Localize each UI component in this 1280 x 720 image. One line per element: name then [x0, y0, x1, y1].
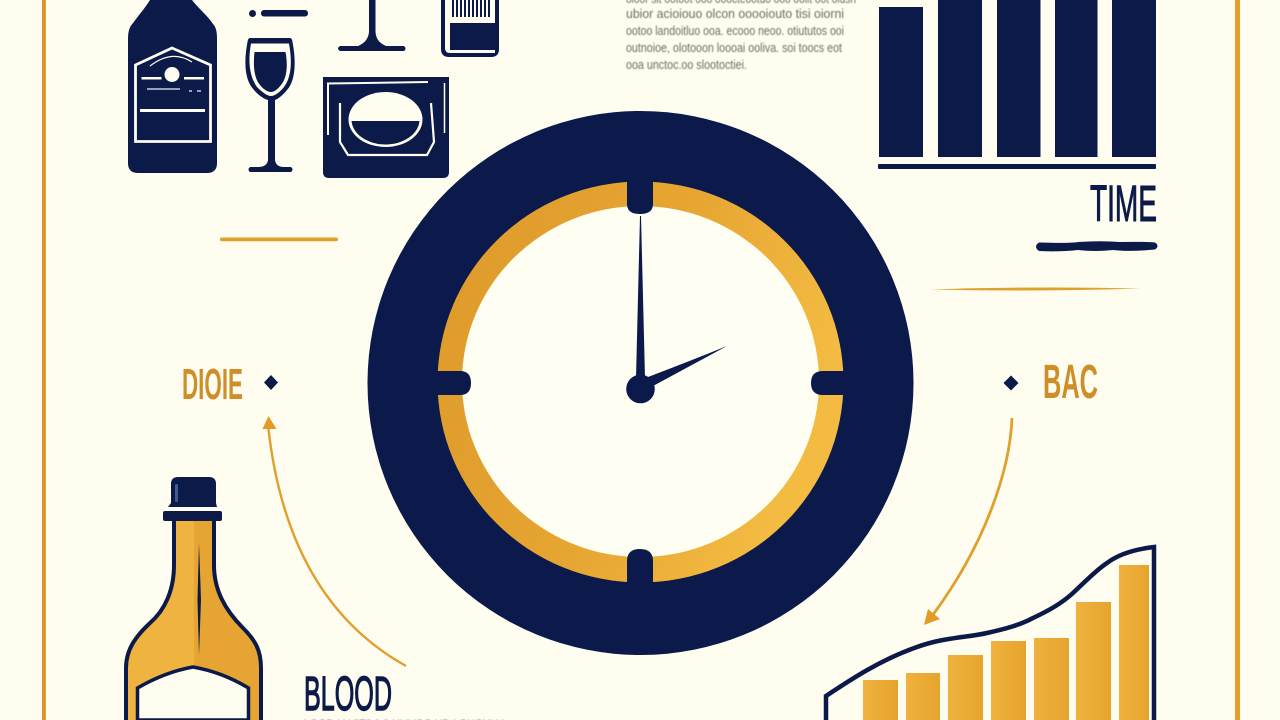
paragraph text: ootoo landoitluo ooa. ecooo neoo. otiututos ooi	[626, 24, 844, 38]
label: BAC: BAC	[1043, 356, 1098, 409]
icon: label box top right of glass	[441, 0, 499, 57]
icon: amber bottle	[126, 477, 261, 720]
small dash above wine glass	[249, 10, 308, 17]
icon: glass stem at top	[338, 0, 406, 51]
paragraph text: ubior acioiouo olcon ooooiouto tisi oiorni	[626, 7, 844, 21]
paragraph text	[626, 0, 856, 72]
arrow: BAC to chart	[924, 418, 1012, 625]
chart curve outline	[826, 547, 1154, 720]
diamond marker left	[264, 375, 278, 390]
label: DIOIE: DIOIE	[182, 360, 243, 409]
clock face	[462, 206, 819, 557]
arrow: blood to dose	[262, 416, 406, 666]
clock hands	[626, 216, 727, 403]
bar chart: time	[878, 0, 1156, 169]
diamond marker right	[1004, 376, 1018, 390]
clock	[368, 111, 914, 655]
icon: framed liquor label	[323, 77, 449, 178]
paragraph text: outnoioe, olotooon loooai ooliva. soi toocs eot	[626, 41, 842, 55]
clock gold ring	[438, 182, 844, 582]
right gold divider	[930, 287, 1140, 291]
right frame line	[1235, 0, 1240, 720]
underline below TIME	[1036, 241, 1158, 251]
heading: TIME: TIME	[1090, 175, 1157, 232]
clock outer navy ring	[368, 111, 914, 655]
left frame line	[42, 0, 46, 720]
chart: rising BAC	[826, 547, 1154, 720]
icon: wine glass	[245, 38, 295, 172]
paragraph text: ooa unctoc.oo slootoctiei.	[626, 58, 747, 72]
left gold divider	[220, 238, 338, 241]
label: BLOOD: BLOOD	[304, 668, 392, 720]
clock tick marks	[430, 175, 850, 590]
icon: dark whisky bottle	[128, 0, 217, 173]
chart gold bars	[863, 565, 1149, 720]
